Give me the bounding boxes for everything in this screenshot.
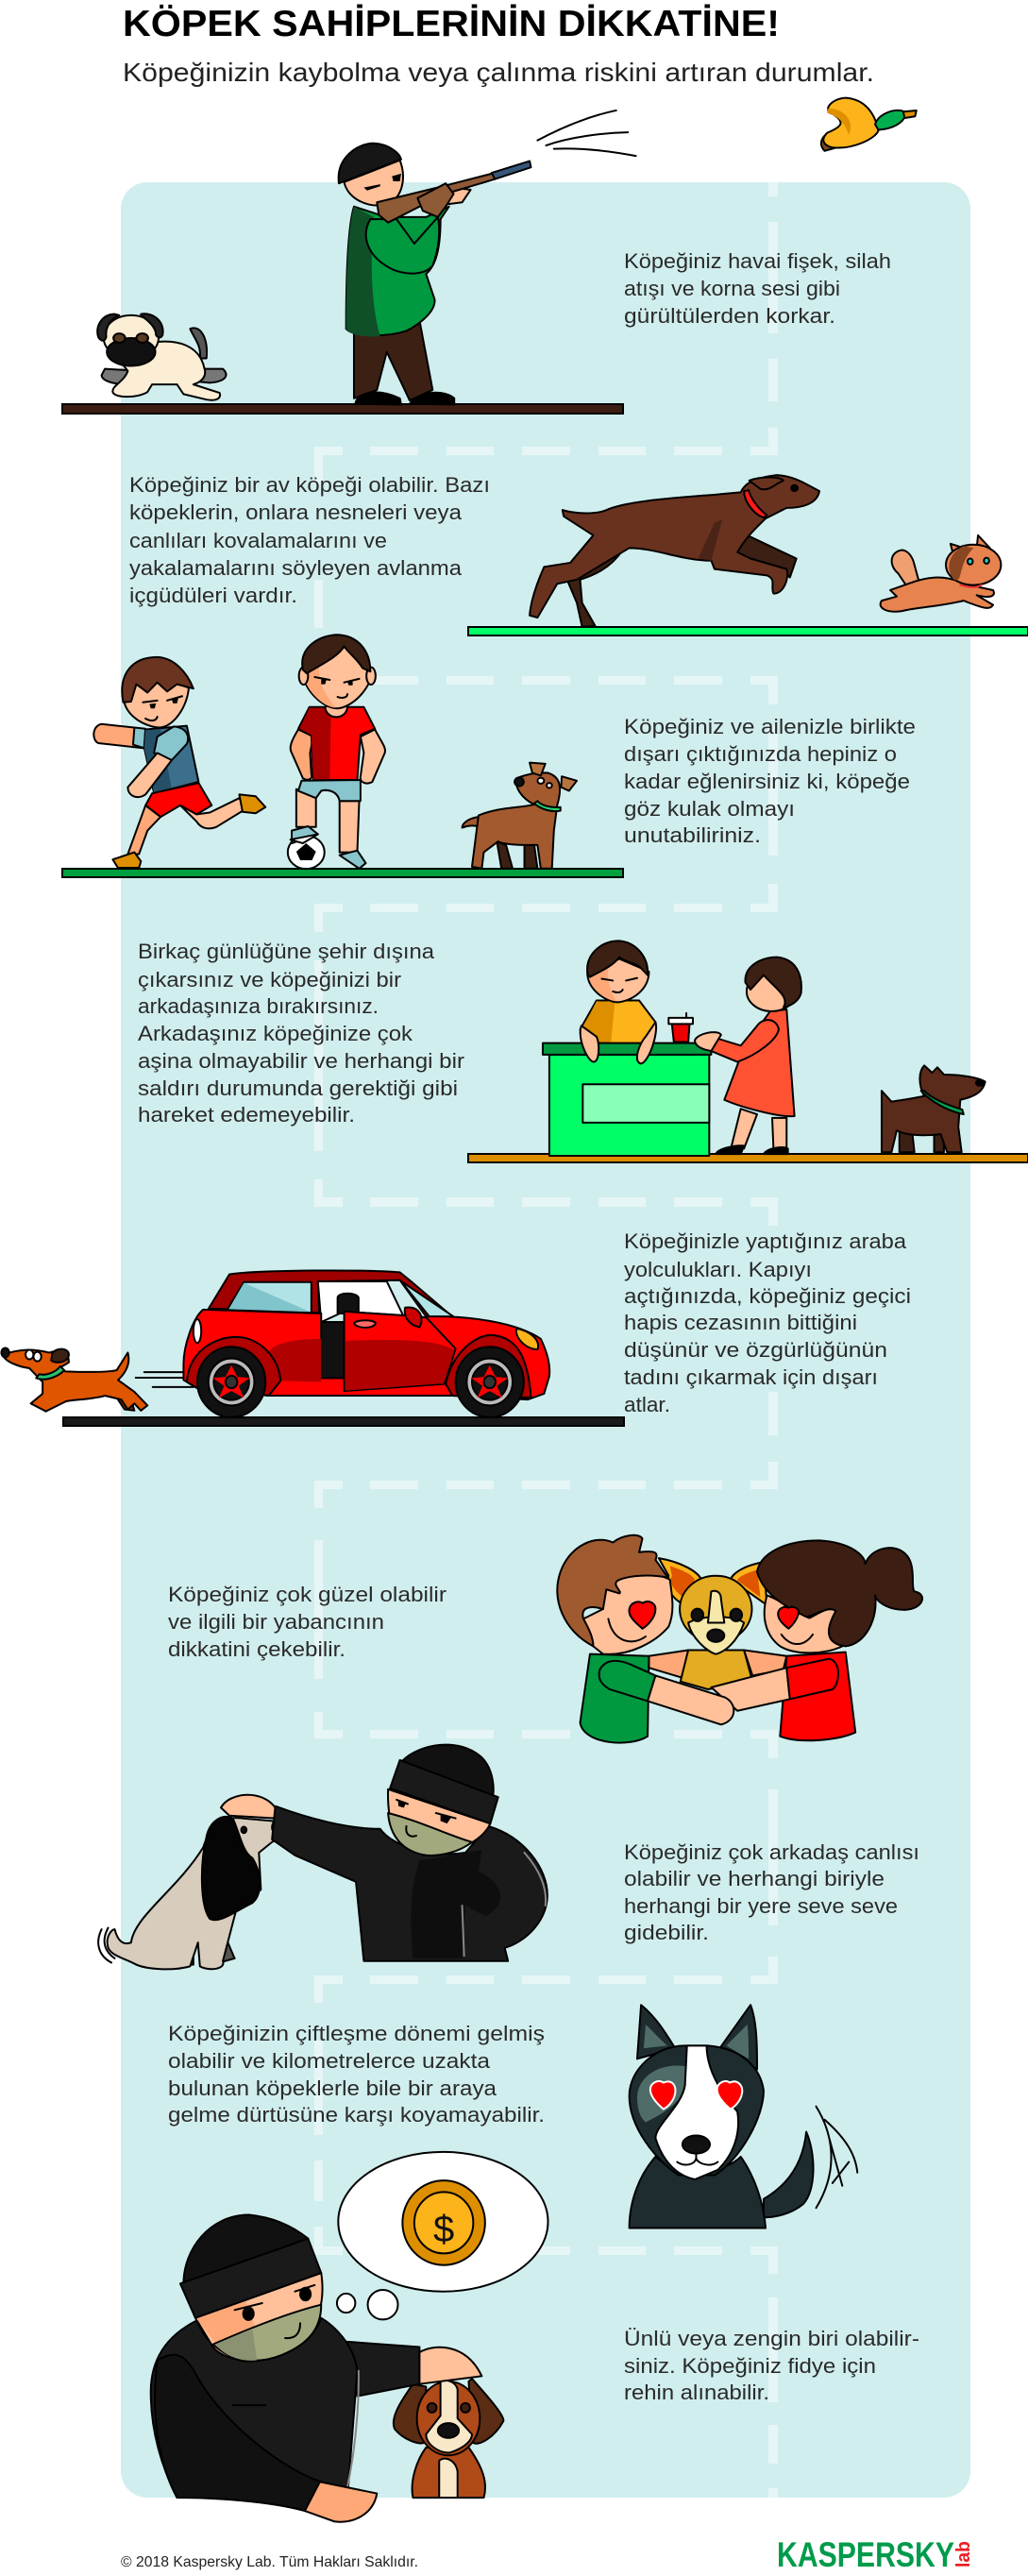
background panel xyxy=(121,182,970,2498)
cup xyxy=(668,1013,693,1042)
text block: mating season: olabilir ve kilometrelerce uzakta xyxy=(168,2049,491,2073)
text block: friendly dog: herhangi bir yere seve seve xyxy=(624,1894,898,1918)
text block: friendly dog xyxy=(624,1840,919,1944)
text block: beautiful dog: Köpeğiniz çok güzel olabilir xyxy=(168,1583,447,1606)
small brown dog xyxy=(463,763,577,869)
text block: hunting dog xyxy=(129,473,490,607)
text block: family fun: dışarı çıktığınızda hepiniz o xyxy=(624,742,897,766)
couple and puppy xyxy=(557,1535,922,1743)
text block: friend care: çıkarsınız ve köpeğinizi bir xyxy=(138,968,401,991)
text block: family fun: göz kulak olmayı xyxy=(624,797,795,821)
text block: mating season: Köpeğinizin çiftleşme dönemi gelmiş xyxy=(168,2022,545,2045)
text block: hunting dog: canlıları kovalamalarını ve xyxy=(129,529,387,552)
text block: family fun: Köpeğiniz ve ailenizle birlikte xyxy=(624,715,916,738)
text block: family fun: kadar eğlenirsiniz ki, köpeğe xyxy=(624,770,910,793)
thought bubble: $ xyxy=(433,2209,454,2250)
text block: car rides: hapis cezasının bittiğini xyxy=(624,1311,857,1334)
girl xyxy=(695,958,801,1154)
text block: friend care: aşina olmayabilir ve herhangi bir xyxy=(138,1049,464,1073)
text block: mating season xyxy=(168,2022,545,2127)
dachshund xyxy=(1,1347,147,1412)
text block: family fun: unutabiliriniz. xyxy=(624,823,761,847)
text block: hunting dog: köpeklerin, onlara nesneleri veya xyxy=(129,500,463,524)
text block: car rides: yolculukları. Kapıyı xyxy=(624,1258,812,1281)
text block: friend care: Arkadaşınız köpeğinize çok xyxy=(138,1022,413,1045)
text block: friendly dog: Köpeğiniz çok arkadaş canlısı xyxy=(624,1840,919,1864)
text block: friendly dog: olabilir ve herhangi biriyle xyxy=(624,1867,885,1890)
text block: beautiful dog: ve ilgili bir yabancının xyxy=(168,1610,384,1634)
text block: beautiful dog: dikkatini çekebilir. xyxy=(168,1637,345,1661)
text block: hunting dog: içgüdüleri vardır. xyxy=(129,584,297,607)
text block: friend care xyxy=(138,940,464,1127)
sitting dog xyxy=(98,1795,285,1969)
text block: car rides: açtığınızda, köpeğiniz geçici xyxy=(624,1284,911,1308)
subtitle: Köpeğinizin kaybolma veya çalınma riskini artıran durumlar. xyxy=(123,58,874,87)
counter xyxy=(549,1055,709,1156)
title: KÖPEK SAHİPLERİNİN DİKKATİNE! xyxy=(123,4,780,44)
car xyxy=(183,1270,549,1417)
text block: noise xyxy=(624,249,891,328)
text block: ransom: Ünlü veya zengin biri olabilir- xyxy=(624,2327,919,2350)
text block: hunting dog: Köpeğiniz bir av köpeği olabilir. Bazı xyxy=(129,473,490,497)
text block: friend care: saldırı durumunda gerektiği gibi xyxy=(138,1076,458,1100)
text block: friend care: Birkaç günlüğüne şehir dışına xyxy=(138,940,435,963)
thief 2 xyxy=(151,2215,481,2522)
cat xyxy=(881,535,1001,612)
text block: mating season: gelme dürtüsüne karşı koyamayabilir. xyxy=(168,2103,545,2127)
text block: car rides: tadını çıkarmak için dışarı xyxy=(624,1365,878,1389)
text block: ransom xyxy=(624,2327,919,2404)
dark brown dog xyxy=(882,1065,986,1152)
shelf bars xyxy=(62,404,1028,1426)
speed lines xyxy=(136,1372,194,1387)
text block: car rides: düşünür ve özgürlüğünün xyxy=(624,1338,887,1362)
text block: hunting dog: yakalamalarını söyleyen avlanma xyxy=(129,556,463,580)
text block: noise: atışı ve korna sesi gibi xyxy=(624,277,840,300)
text block: mating season: bulunan köpeklerle bile bir araya xyxy=(168,2076,497,2100)
text block: beautiful dog xyxy=(168,1583,447,1661)
text block: noise: gürültülerden korkar. xyxy=(624,304,835,328)
pug xyxy=(97,314,226,400)
text block: ransom: siniz. Köpeğiniz fidye için xyxy=(624,2354,876,2378)
boy behind counter xyxy=(581,941,655,1043)
text block: friend care: arkadaşınıza bırakırsınız. xyxy=(138,994,379,1018)
footer copyright: © 2018 Kaspersky Lab. Tüm Hakları Saklıdır. xyxy=(121,2554,418,2570)
text block: family fun xyxy=(624,715,916,847)
kicking boy xyxy=(93,657,265,868)
running dog xyxy=(530,475,819,627)
brown puppy xyxy=(394,2379,503,2498)
logo: Kaspersky Lab: KASPERSKY xyxy=(777,2535,954,2574)
text block: friendly dog: gidebilir. xyxy=(624,1921,709,1944)
text block: noise: Köpeğiniz havai fişek, silah xyxy=(624,249,891,273)
standing boy with ball xyxy=(288,635,385,869)
text block: car rides: atlar. xyxy=(624,1393,670,1416)
boy arms xyxy=(581,1022,656,1063)
text block: ransom: rehin alınabilir. xyxy=(624,2381,769,2404)
husky xyxy=(630,2005,857,2229)
text block: car rides: Köpeğinizle yaptığınız araba xyxy=(624,1229,907,1253)
shot trails xyxy=(537,110,636,156)
hunter xyxy=(339,144,531,405)
counter top xyxy=(543,1043,711,1055)
icon: duck xyxy=(821,98,917,151)
logo: Kaspersky Lab: lab xyxy=(953,2541,974,2568)
text block: car rides xyxy=(624,1229,911,1416)
thought bubble xyxy=(337,2152,548,2319)
thief 1 xyxy=(272,1745,548,1961)
text block: friend care: hareket edemeyebilir. xyxy=(138,1103,355,1127)
